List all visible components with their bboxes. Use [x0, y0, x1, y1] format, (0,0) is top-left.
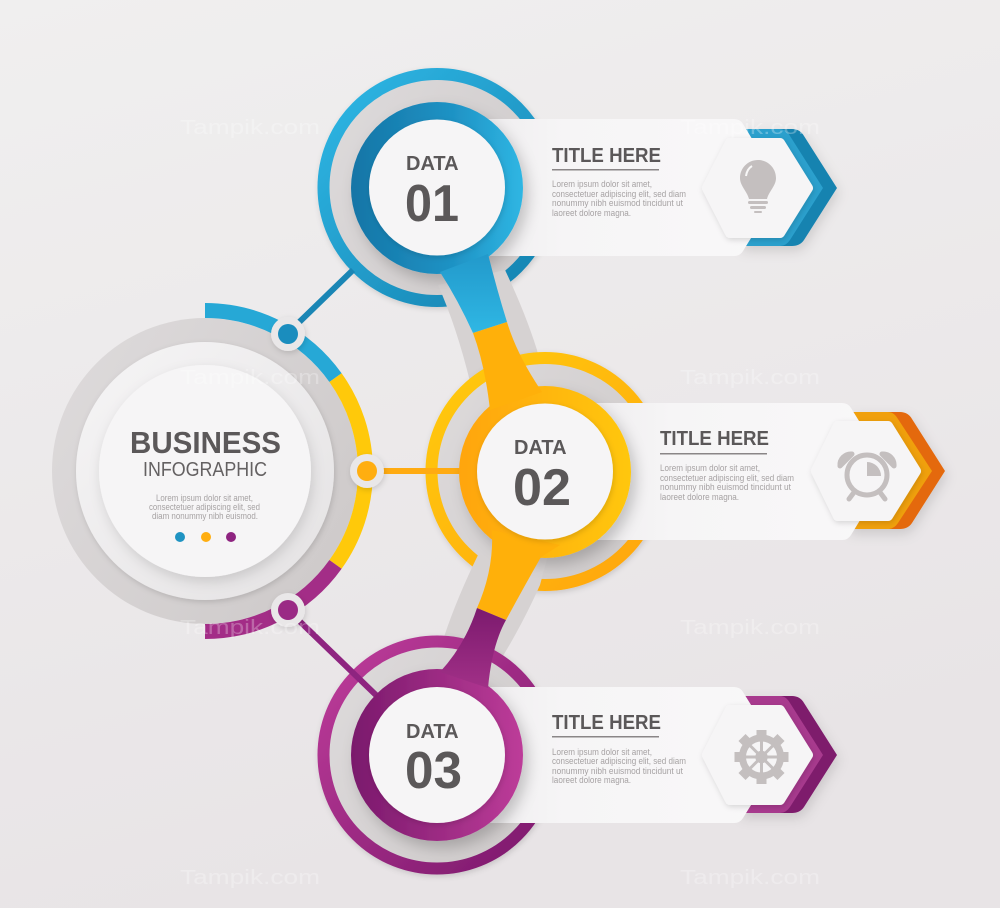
- hexagon 03: [707, 710, 808, 800]
- gray road between node 01 and 02: [438, 270, 545, 390]
- central business circle: [52, 310, 365, 632]
- label: DATA: [514, 437, 567, 459]
- connector node: blue: [271, 317, 305, 351]
- text block 03: TITLE HERE: [552, 712, 661, 734]
- watermarks: [180, 117, 820, 889]
- text block 02: consectetuer adipiscing elit, sed diam: [660, 473, 794, 484]
- arc: yellow: [336, 378, 365, 564]
- text block 01: laoreet dolore magna.: [552, 208, 631, 219]
- text block 01: nonummy nibh euismod tincidunt ut: [552, 198, 683, 209]
- node 01 outer ring: [324, 74, 550, 301]
- text block 02: nonummy nibh euismod tincidunt ut: [660, 482, 791, 493]
- text block 01: [552, 145, 686, 219]
- stem: purple: [440, 608, 506, 688]
- arc: purple: [205, 564, 336, 632]
- text block 01: TITLE HERE: [552, 145, 661, 167]
- hexagon 02: [816, 426, 916, 516]
- mid white disc: [76, 342, 334, 600]
- watermarks: Tampik.com: [180, 617, 320, 639]
- white disc: [477, 404, 613, 540]
- text block 02: TITLE HERE: [660, 428, 769, 450]
- text block 03: Lorem ipsum dolor sit amet,: [552, 747, 652, 758]
- card: [470, 119, 782, 256]
- node 03 outer ring: [324, 642, 550, 868]
- connector node: yellow: [350, 454, 384, 488]
- watermarks: Tampik.com: [680, 367, 820, 389]
- number: 02: [513, 459, 571, 517]
- white disc: [369, 687, 505, 823]
- inner white disc: [99, 365, 311, 577]
- arrow layers: [740, 129, 837, 246]
- hexagon 01: [707, 143, 808, 233]
- icon: gear: [734, 730, 788, 784]
- stem: yellow upper: [473, 322, 542, 410]
- node 01 colored ring: [351, 102, 523, 274]
- node 03 circle: [369, 687, 505, 823]
- number: 03: [405, 742, 462, 800]
- panel 03: [470, 687, 837, 823]
- white disc: [369, 120, 505, 256]
- icon: alarm clock: [840, 454, 894, 499]
- arrow layers: [848, 412, 945, 529]
- description text: diam nonummy nibh euismod.: [152, 511, 258, 522]
- connector line: blue: [288, 270, 353, 333]
- text block 02: [660, 428, 794, 503]
- node 01 circle: [369, 120, 505, 256]
- arc: blue: [205, 310, 336, 378]
- text block 03: laoreet dolore magna.: [552, 775, 631, 786]
- panel 01: [470, 119, 837, 256]
- label: DATA: [406, 153, 459, 175]
- gray road between node 02 and 03: [443, 555, 548, 672]
- icon: light bulb: [740, 160, 776, 213]
- text block 03: [552, 712, 686, 786]
- watermarks: Tampik.com: [180, 867, 320, 889]
- text block 03: nonummy nibh euismod tincidunt ut: [552, 766, 683, 777]
- connector line: yellow: [367, 468, 462, 474]
- card: [578, 403, 890, 540]
- label: DATA: [406, 721, 459, 743]
- node 02 outer ring: [432, 358, 658, 585]
- watermarks: Tampik.com: [180, 367, 320, 389]
- description text: [149, 493, 260, 522]
- arrow layers: [740, 696, 837, 813]
- panel 02: [578, 403, 945, 540]
- watermarks: Tampik.com: [680, 117, 820, 139]
- text block 01: consectetuer adipiscing elit, sed diam: [552, 189, 686, 200]
- number: 01: [405, 175, 459, 233]
- connector line: purple: [288, 610, 378, 697]
- watermarks: Tampik.com: [680, 867, 820, 889]
- text block 02: laoreet dolore magna.: [660, 492, 739, 503]
- stem: blue: [440, 254, 507, 333]
- gray outer disc: [52, 318, 358, 624]
- stem: yellow lower: [477, 530, 560, 620]
- node 03 colored ring: [351, 669, 523, 841]
- heading: business: BUSINESS: [130, 425, 281, 460]
- text block 01: Lorem ipsum dolor sit amet,: [552, 179, 652, 190]
- text block 03: consectetuer adipiscing elit, sed diam: [552, 756, 686, 767]
- card: [470, 687, 782, 823]
- node 02 circle: [477, 404, 613, 540]
- subheading: infographic: INFOGRAPHIC: [143, 459, 267, 481]
- legend dots: [175, 532, 236, 542]
- watermarks: Tampik.com: [180, 117, 320, 139]
- connector node: purple: [271, 593, 305, 627]
- description text: consectetuer adipiscing elit, sed: [149, 502, 260, 513]
- description text: Lorem ipsum dolor sit amet,: [156, 493, 253, 504]
- text block 02: Lorem ipsum dolor sit amet,: [660, 463, 760, 474]
- node 02 colored ring: [459, 386, 631, 558]
- watermarks: Tampik.com: [680, 617, 820, 639]
